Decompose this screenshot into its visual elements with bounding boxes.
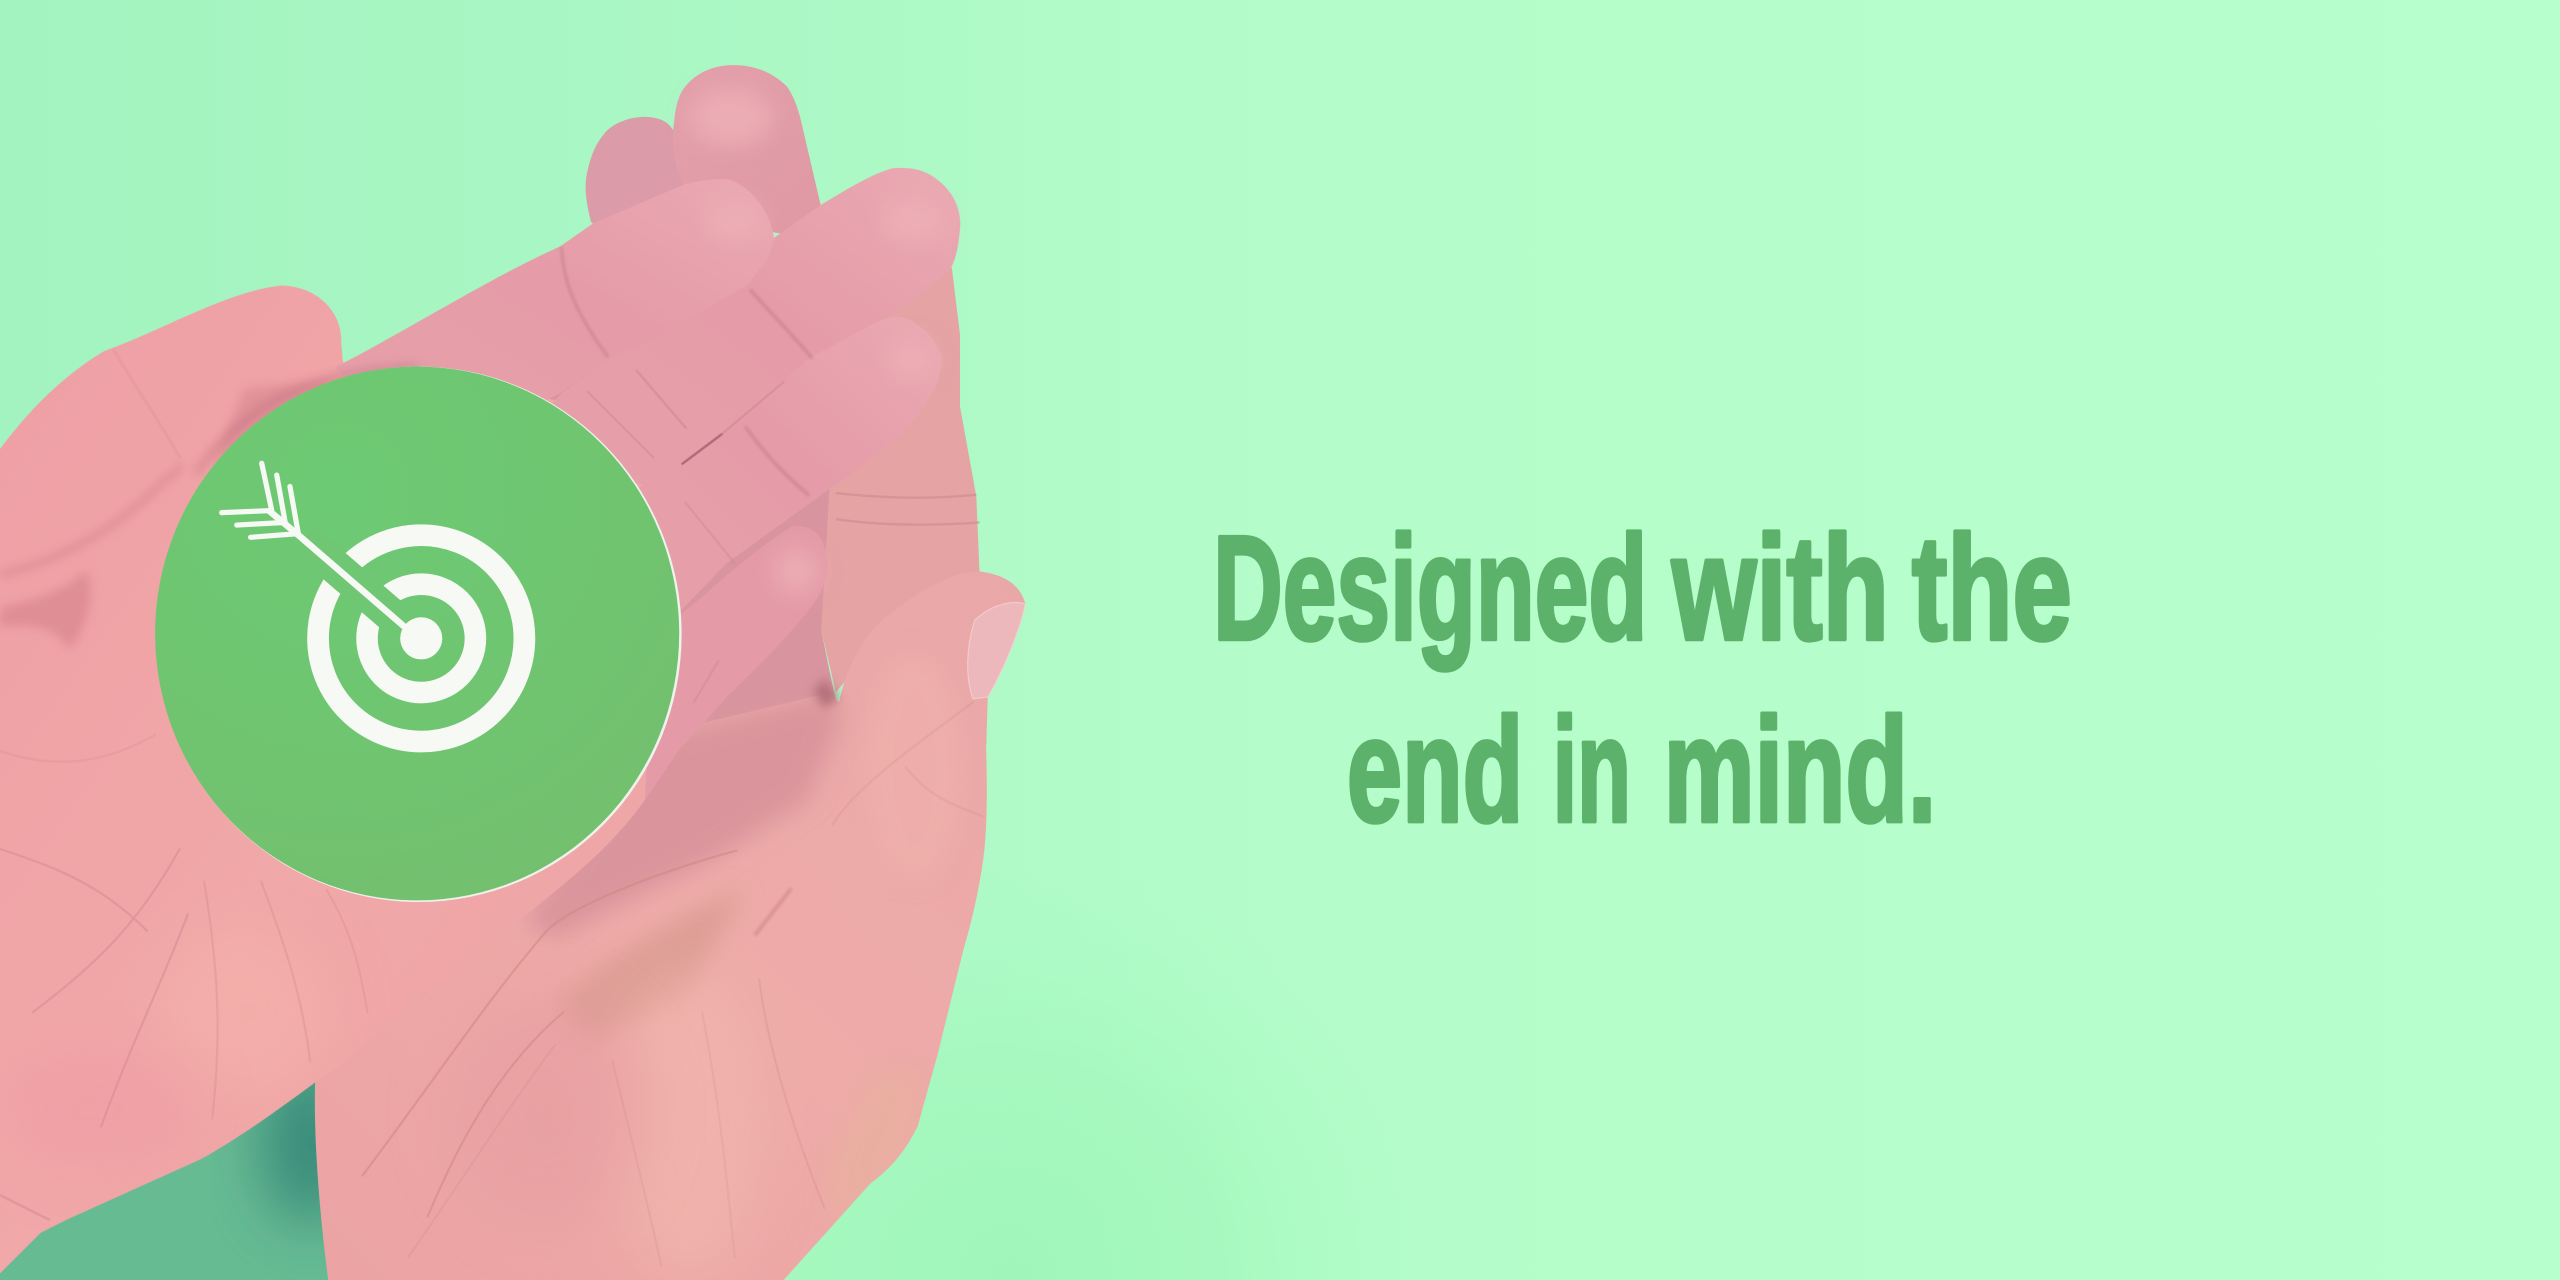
back finger, small: [586, 117, 686, 245]
headline line 1: Designed: [1213, 506, 1647, 671]
index finger: [335, 179, 774, 428]
back finger, tall: [673, 65, 849, 245]
right palm and thumb: [315, 571, 1025, 1280]
deep shadow between hands: [813, 678, 839, 709]
headline line 1: with: [1671, 506, 1889, 671]
headline line 2: mind.: [1664, 688, 1936, 853]
headline line 1: the: [1912, 506, 2072, 671]
finger creases: [562, 248, 811, 702]
finger highlights: [689, 88, 947, 594]
shadow under the hands: [0, 1082, 328, 1280]
disc edge: [156, 367, 682, 902]
creases on the hand edge: [836, 493, 980, 525]
disc shadow: [196, 367, 418, 473]
background: [0, 0, 1286, 1280]
icon: arrow: [222, 463, 407, 629]
ring finger: [620, 317, 942, 629]
outer edge of the hand behind the fingers: [767, 245, 980, 692]
left palm and thumb: [0, 286, 681, 1273]
photo: left hand holding the disc: [0, 88, 960, 1273]
thumbnail: [968, 602, 1025, 699]
arrow gap cut through the rings: [304, 540, 392, 616]
disc face: [155, 367, 679, 900]
pinky finger: [645, 526, 827, 800]
headline line 2: end: [1347, 688, 1523, 853]
icon: target: [318, 535, 524, 742]
dark base behind the fingers: [490, 286, 836, 931]
headline line 2: [1347, 688, 1936, 853]
headline: [1213, 506, 2072, 853]
photo: right hand behind, cupping: [315, 65, 1025, 1280]
shading inside the right palm: [362, 653, 983, 1280]
palm shading and creases: [0, 351, 367, 1220]
green disc with target icon: [155, 367, 682, 902]
middle finger: [539, 168, 960, 485]
headline line 2: in: [1553, 688, 1631, 853]
